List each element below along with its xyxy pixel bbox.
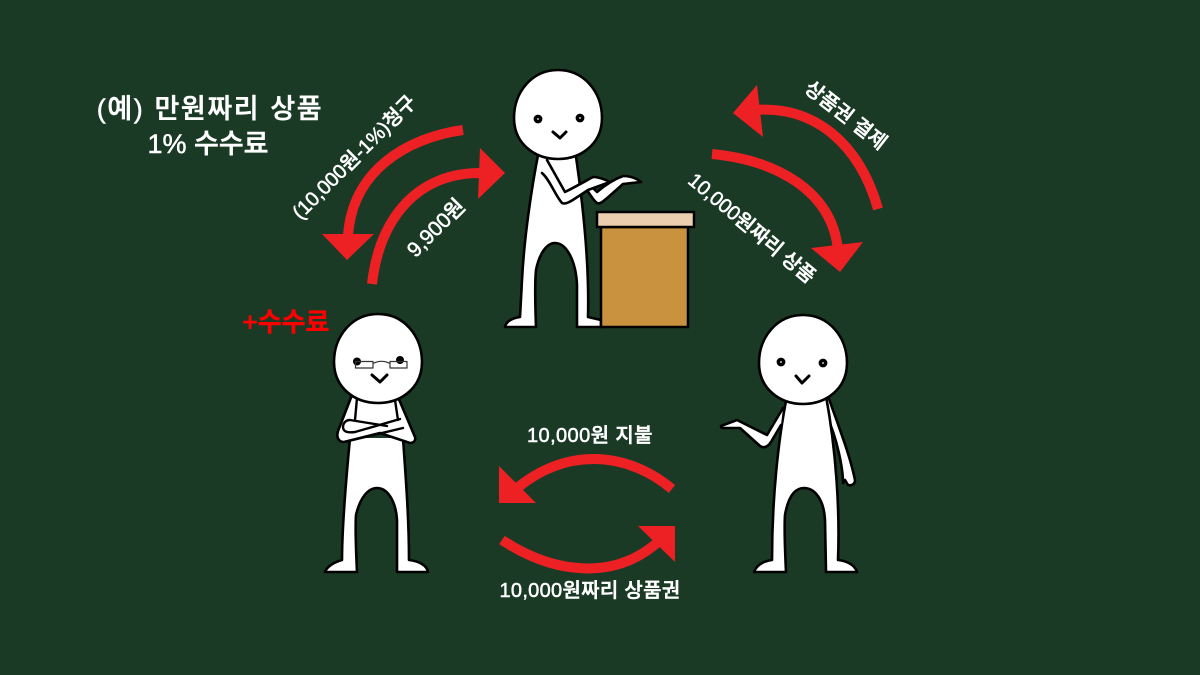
arrow: payment to customer side bbox=[499, 459, 672, 503]
arrow: 9,900 won payment bbox=[372, 148, 505, 284]
arrow: gift card payment bbox=[733, 85, 878, 209]
label: goods worth 10,000 won: 10,000원짜리 상품 bbox=[683, 169, 820, 288]
label: plus fee: +수수료 bbox=[243, 307, 329, 337]
figure: card company with glasses bbox=[325, 314, 428, 572]
heading: example condition bbox=[97, 94, 323, 159]
label: gift card worth 10,000 won: 10,000원짜리 상품권 bbox=[499, 579, 681, 602]
figure: customer bbox=[721, 315, 857, 572]
arrow: goods delivered bbox=[712, 154, 863, 272]
box: product counter bbox=[597, 212, 694, 327]
label: gift card payment: 상품권 결제 bbox=[800, 76, 891, 154]
label: claim amount: (10,000원-1%)청구 bbox=[288, 91, 421, 224]
heading: example condition: 1% 수수료 bbox=[147, 129, 269, 159]
arrow: merchant claims to card company bbox=[322, 130, 463, 260]
heading: example condition: (예) 만원짜리 상품 bbox=[97, 94, 323, 124]
label: pay 10,000 won: 10,000원 지불 bbox=[527, 424, 653, 447]
label: 9,900 won: 9,900원 bbox=[403, 195, 470, 262]
figure: merchant bbox=[505, 70, 641, 327]
arrow: gift card to customer bbox=[502, 526, 675, 568]
